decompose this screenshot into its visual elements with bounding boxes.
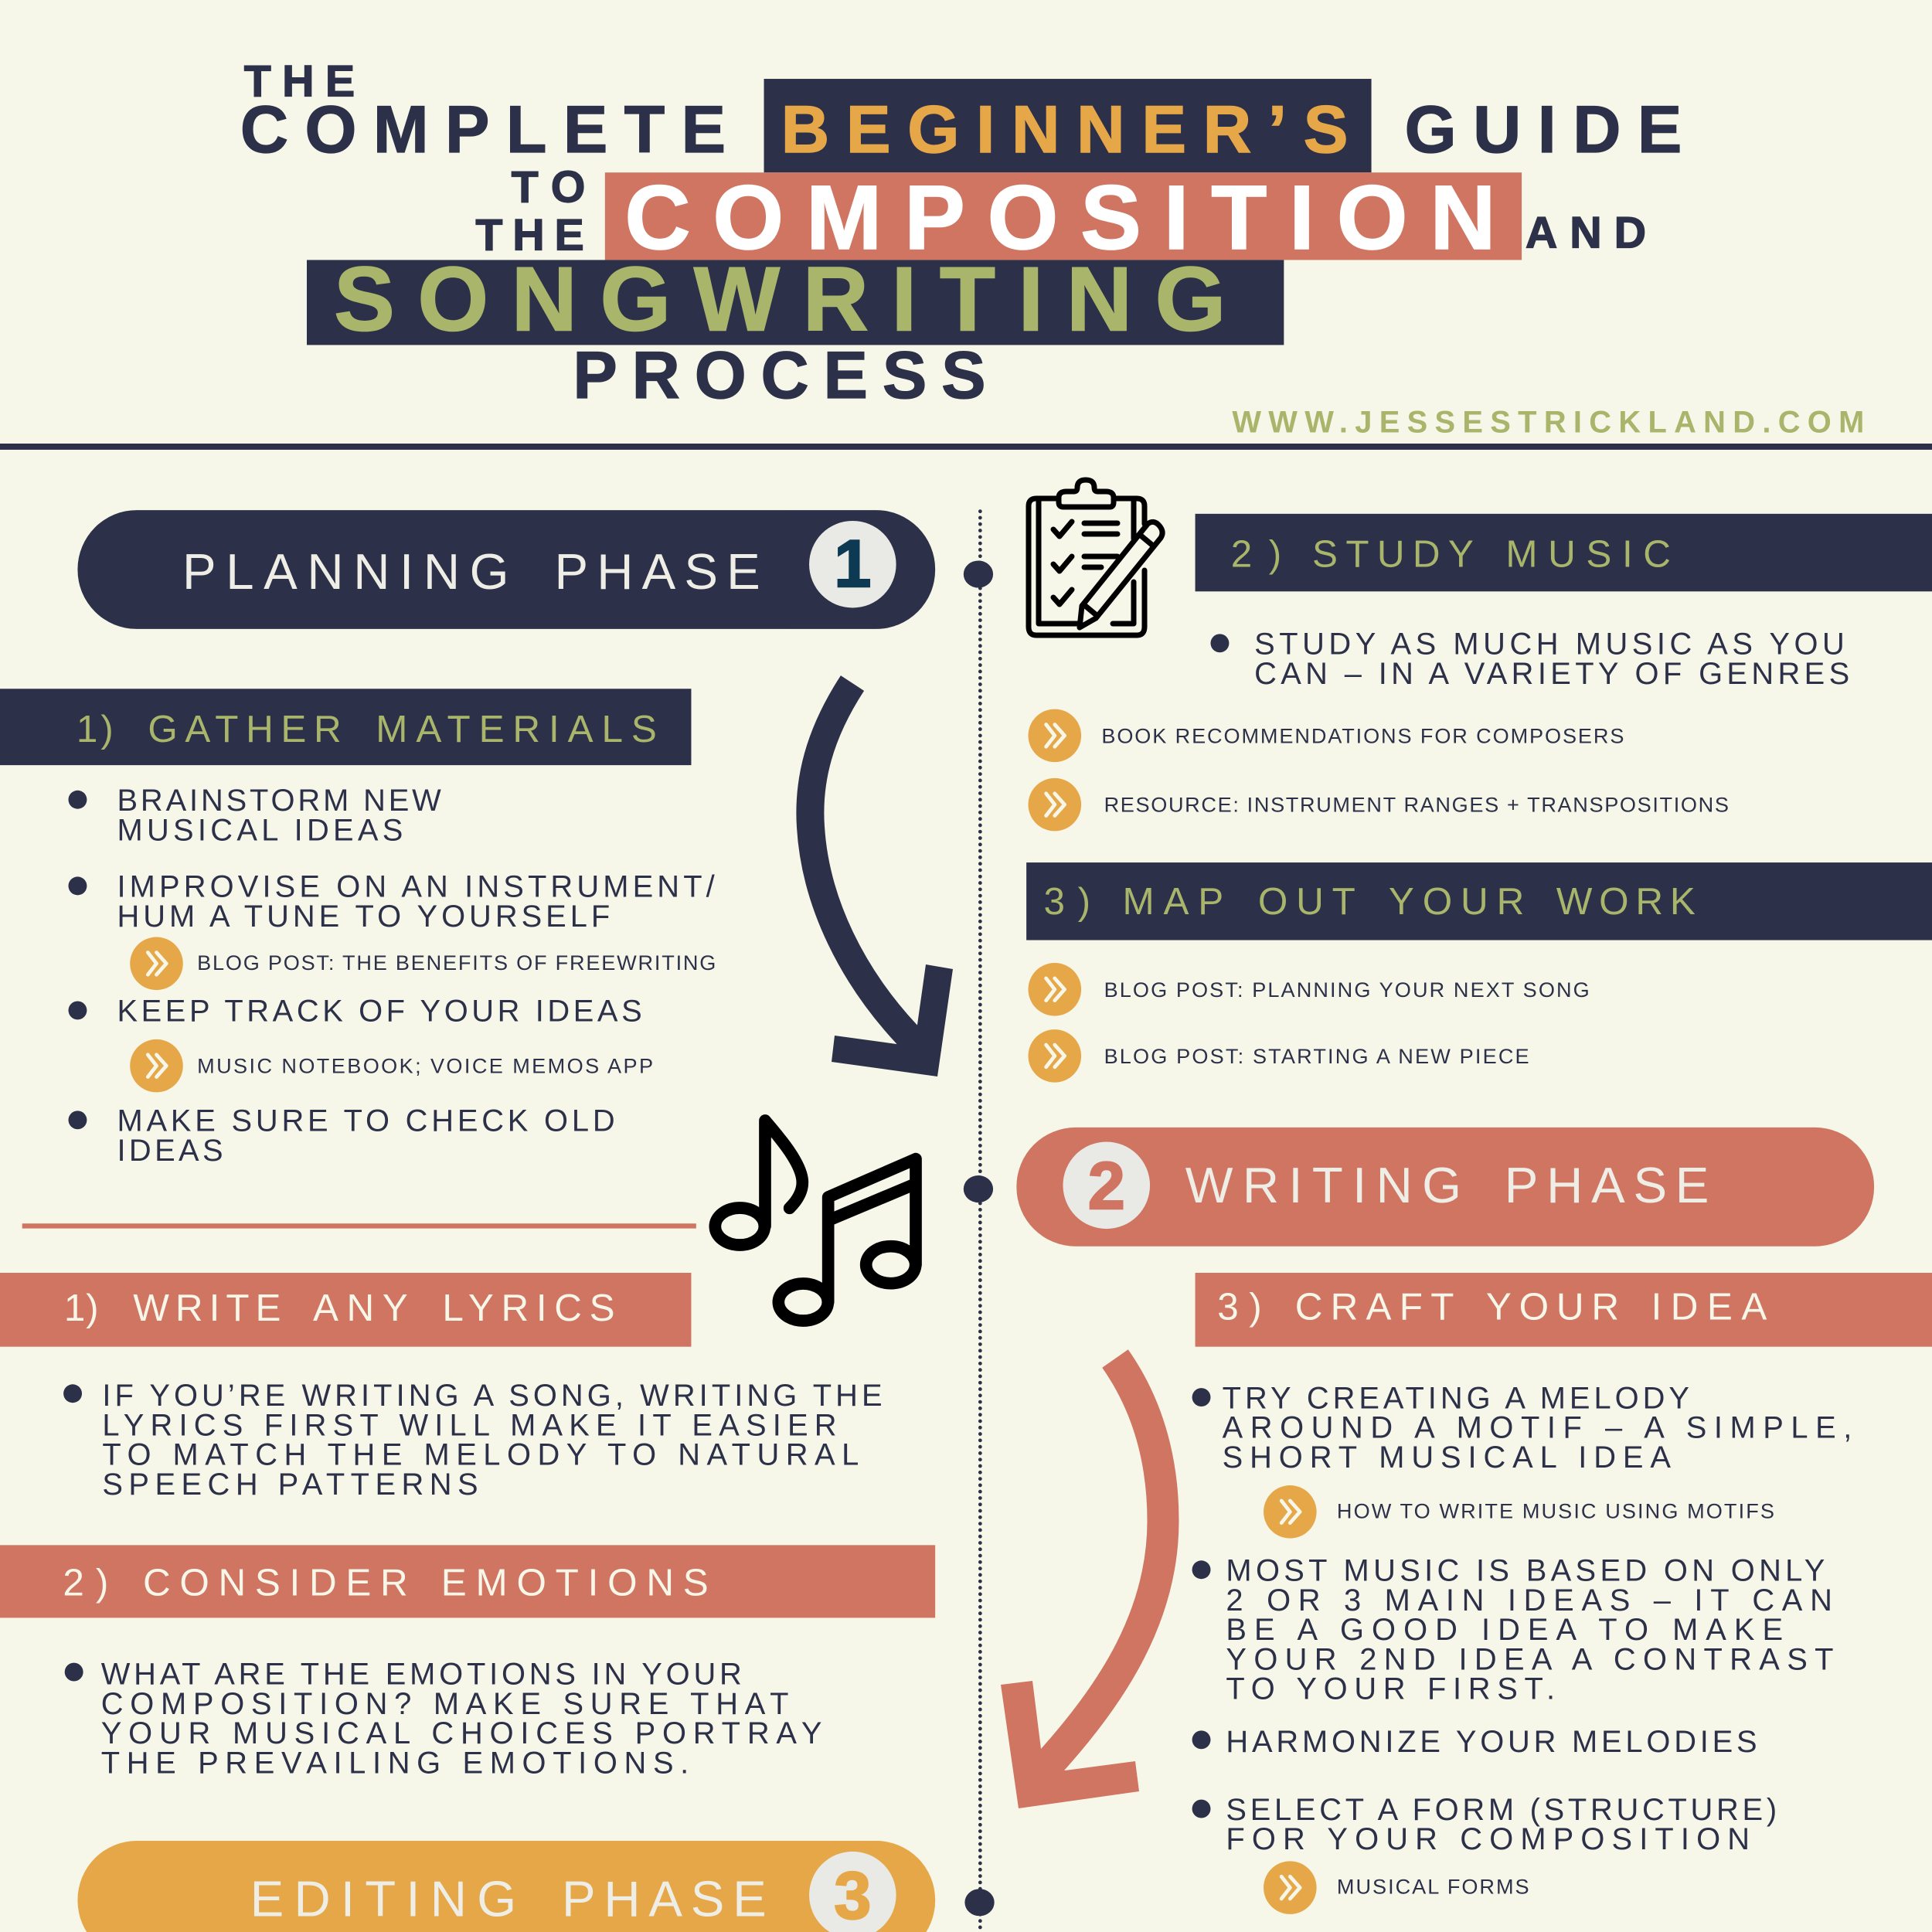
section heading bar: LYRICS (442, 1287, 615, 1329)
section: consider emotions: COMPOSITION? MAKE SURE THAT (101, 1687, 788, 1721)
section: craft your idea: TO YOUR FIRST. (1226, 1672, 1555, 1706)
phase pill: editing phase: PHASE (562, 1870, 767, 1927)
section: consider emotions: THE PREVAILING EMOTIONS. (101, 1746, 689, 1780)
section: craft your idea: MOST MUSIC IS BASED ON ONLY (1226, 1554, 1825, 1588)
section heading bar: ANY (313, 1287, 408, 1329)
title highlight: composition: COMPOSITION (624, 167, 1496, 269)
section: craft your idea: MUSICAL FORMS (1337, 1875, 1529, 1899)
section heading bar: MUSIC (1505, 532, 1671, 575)
section heading bar: CRAFT (1295, 1286, 1454, 1328)
section: craft your idea: SHORT MUSICAL IDEA (1223, 1440, 1671, 1475)
website url: WWW.JESSESTRICKLAND.COM (1232, 406, 1864, 440)
section: craft your idea: HARMONIZE YOUR MELODIES (1226, 1725, 1757, 1759)
title block: GUIDE (1405, 93, 1682, 167)
section heading bar: CONSIDER (143, 1562, 408, 1604)
coral divider (22, 1223, 696, 1229)
section heading bar: WRITE (133, 1287, 281, 1329)
phase pill: planning phase: PHASE (554, 543, 760, 600)
section heading bar: MAP (1122, 880, 1223, 923)
phase pill: writing phase: WRITING (1185, 1157, 1461, 1213)
section: study music: CAN – IN A VARIETY OF GENRES (1254, 657, 1849, 691)
section heading bar: 3) (1217, 1286, 1262, 1328)
section: map out your work: BLOG POST: STARTING A NEW PIECE (1104, 1044, 1529, 1068)
section heading bar (0, 1273, 691, 1347)
header divider (0, 444, 1932, 450)
section: gather materials: IMPROVISE ON AN INSTRUMENT/ (117, 870, 716, 904)
section heading bar: WORK (1556, 880, 1696, 923)
section: craft your idea: BE A GOOD IDEA TO MAKE (1226, 1613, 1783, 1647)
phase pill: writing phase (1016, 1128, 1874, 1247)
section: gather materials: MAKE SURE TO CHECK OLD (117, 1104, 615, 1138)
section: map out your work: BLOG POST: PLANNING YOUR NEXT SONG (1104, 978, 1590, 1002)
section: craft your idea: 2 OR 3 MAIN IDEAS – IT CAN (1226, 1583, 1832, 1617)
phase pill: editing phase (77, 1841, 935, 1932)
section: craft your idea (1192, 1273, 1932, 1914)
section heading bar: EMOTIONS (441, 1562, 709, 1604)
section: consider emotions: WHAT ARE THE EMOTIONS IN YOUR (101, 1658, 742, 1692)
section heading bar: 2) (1231, 532, 1281, 575)
title block: PROCESS (573, 338, 986, 413)
timeline: dotted line with phase nodes (964, 512, 995, 1932)
section heading bar: GATHER (148, 708, 342, 750)
section: gather materials: MUSIC NOTEBOOK; VOICE MEMOS APP (197, 1054, 653, 1078)
section: write any lyrics (0, 1273, 883, 1502)
section: write any lyrics: IF YOU’RE WRITING A SONG, WRITING THE (102, 1379, 883, 1413)
section heading bar: 2) (63, 1562, 108, 1604)
section: gather materials (0, 689, 716, 1168)
section: consider emotions: YOUR MUSICAL CHOICES PORTRAY (101, 1716, 821, 1750)
section: gather materials: BRAINSTORM NEW (117, 784, 441, 818)
section: gather materials: HUM A TUNE TO YOURSELF (117, 900, 610, 934)
section: study music: STUDY AS MUCH MUSIC AS YOU (1254, 628, 1845, 662)
title highlight: songwriting: SONGWRITING (334, 248, 1226, 350)
section heading bar: YOUR (1389, 880, 1524, 923)
section heading bar (1196, 1273, 1932, 1347)
title highlight: beginner's: BEGINNER’S (781, 93, 1348, 167)
section heading bar (1026, 862, 1932, 940)
section heading bar (1196, 514, 1932, 591)
title block (240, 56, 1682, 413)
section: craft your idea: TRY CREATING A MELODY (1223, 1381, 1689, 1415)
phase pill: editing phase: EDITING (250, 1870, 516, 1927)
section heading bar: MATERIALS (376, 708, 657, 750)
phase pill: writing phase: 2 (1088, 1149, 1125, 1223)
section: craft your idea: AROUND A MOTIF – A SIMPLE, (1223, 1411, 1852, 1445)
section: write any lyrics: SPEECH PATTERNS (102, 1468, 478, 1502)
phase pill: planning phase: PLANNING (182, 543, 509, 600)
section: craft your idea: SELECT A FORM (STRUCTURE) (1226, 1793, 1777, 1827)
section: gather materials: MUSICAL IDEAS (117, 813, 403, 847)
section: craft your idea: HOW TO WRITE MUSIC USING MOTIFS (1337, 1498, 1774, 1522)
phase pill: writing phase: PHASE (1505, 1157, 1709, 1213)
section: study music (1029, 514, 1932, 831)
section heading bar: 3) (1043, 880, 1090, 923)
arrow: planning phase downward (810, 683, 953, 1077)
section heading bar: STUDY (1312, 532, 1474, 575)
section heading bar: 1) (64, 1287, 99, 1329)
title block: THE (244, 56, 355, 106)
section: gather materials: KEEP TRACK OF YOUR IDEAS (117, 995, 642, 1029)
section heading bar: YOUR (1486, 1286, 1619, 1328)
icon: music notes (715, 1121, 916, 1321)
phase pill: editing phase: 3 (834, 1859, 871, 1932)
section: study music: RESOURCE: INSTRUMENT RANGES + TRANSPOSITIONS (1104, 793, 1729, 817)
section: gather materials: BLOG POST: THE BENEFITS OF FREEWRITING (197, 951, 716, 975)
section: consider emotions (0, 1545, 935, 1780)
section: study music: BOOK RECOMMENDATIONS FOR COMPOSERS (1101, 723, 1624, 747)
section: craft your idea: YOUR 2ND IDEA A CONTRAST (1226, 1642, 1833, 1676)
section heading bar (0, 1545, 935, 1617)
section: gather materials: IDEAS (117, 1134, 223, 1168)
icon: clipboard checklist with pencil (1029, 480, 1162, 635)
title block: THE (475, 211, 584, 260)
section: craft your idea: FOR YOUR COMPOSITION (1226, 1822, 1750, 1856)
phase pill: planning phase: 1 (834, 527, 871, 601)
section: write any lyrics: TO MATCH THE MELODY TO NATURAL (102, 1438, 859, 1472)
phase pill: planning phase (77, 510, 935, 629)
section heading bar: 1) (77, 708, 114, 750)
title block: COMPLETE (240, 93, 726, 167)
section: map out your work (1026, 862, 1932, 1083)
title block: TO (512, 162, 585, 212)
arrow: writing phase downward (1001, 1359, 1163, 1808)
section heading bar: IDEA (1651, 1286, 1767, 1328)
title block: AND (1526, 208, 1646, 257)
section heading bar (0, 689, 691, 765)
section: write any lyrics: LYRICS FIRST WILL MAKE IT EASIER (102, 1408, 837, 1442)
section heading bar: OUT (1258, 880, 1355, 923)
